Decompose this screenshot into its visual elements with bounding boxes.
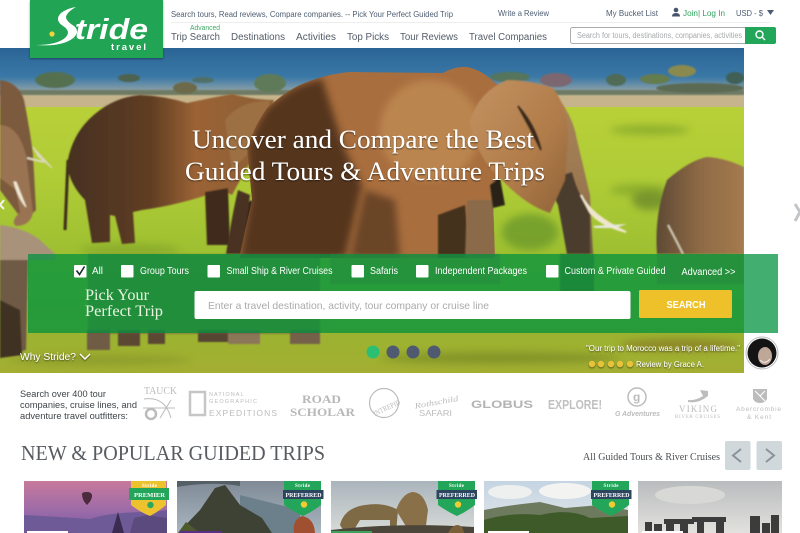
logo: tauck bbox=[143, 386, 178, 419]
logo dot bbox=[49, 31, 55, 37]
main navigation: Tour Reviews bbox=[400, 32, 458, 43]
main navigation: Travel Companies bbox=[469, 32, 547, 43]
carousel button: previous bbox=[725, 441, 750, 470]
header utility links: My Bucket List bbox=[606, 8, 659, 18]
testimonial: "Our trip to Morocco was a trip of a lifetime." bbox=[586, 344, 740, 353]
badge: stride premier: PREMIER bbox=[134, 492, 165, 499]
logo: intrepid bbox=[370, 388, 402, 418]
badge: stride preferred bbox=[591, 481, 632, 516]
search panel: Enter a travel destination, activity, tour company or cruise line bbox=[208, 300, 489, 312]
review rating dots bbox=[589, 361, 633, 367]
main navigation: Activities bbox=[296, 32, 336, 43]
logo swoosh bbox=[36, 7, 77, 45]
badge: stride preferred: PREFERRED bbox=[439, 493, 475, 499]
partners intro text: companies, cruise lines, and bbox=[20, 400, 137, 411]
header logo bbox=[30, 0, 163, 58]
logo: tauck: TAUCK bbox=[144, 386, 178, 397]
badge: stride preferred: Stride bbox=[604, 484, 619, 489]
trip type checkboxes: Safaris bbox=[370, 266, 398, 277]
search button bbox=[745, 27, 776, 44]
header utility links: USD - $ bbox=[736, 8, 763, 18]
header utility links: Write a Review bbox=[498, 8, 550, 18]
testimonial: Review by Grace A. bbox=[636, 360, 704, 369]
search field bbox=[194, 291, 630, 319]
section heading: NEW & POPULAR GUIDED TRIPS bbox=[21, 441, 325, 465]
hero side arrow: previous bbox=[0, 200, 4, 209]
badge: stride preferred: PREFERRED bbox=[286, 493, 322, 499]
main navigation: Destinations bbox=[231, 32, 285, 43]
logo: viking river cruises: VIKING bbox=[679, 404, 718, 414]
logo: abercrombie and kent: & Kent bbox=[747, 414, 771, 421]
logo wordmark: Stride bbox=[74, 14, 148, 46]
logo: abercrombie and kent bbox=[736, 389, 781, 421]
elephant legs under the search band bbox=[87, 254, 744, 350]
logo: g adventures: G Adventures bbox=[615, 411, 660, 418]
search panel bbox=[28, 254, 778, 333]
foreground big elephant bbox=[226, 60, 627, 260]
logo: g adventures: g bbox=[633, 390, 640, 404]
logo: rothschild safari: SAFARI bbox=[419, 408, 452, 418]
trip type checkboxes: Custom & Private Guided bbox=[564, 266, 666, 277]
logo: rothschild safari: Rothschild bbox=[413, 394, 460, 411]
main navigation: Advanced bbox=[190, 23, 220, 32]
partners intro text bbox=[20, 389, 137, 422]
trip type checkboxes: All bbox=[92, 266, 103, 277]
search panel title: Perfect Trip bbox=[85, 303, 163, 320]
search panel title bbox=[85, 287, 163, 320]
logo: explore: EXPLORE! bbox=[548, 397, 602, 412]
logo: national geographic expeditions: NATIONAL bbox=[209, 392, 244, 398]
badge: stride preferred bbox=[283, 481, 324, 516]
reviewer avatar bbox=[745, 336, 779, 370]
testimonial bbox=[586, 344, 740, 369]
logo: road scholar: SCHOLAR bbox=[290, 405, 355, 419]
main navigation: Top Picks bbox=[347, 32, 389, 43]
partner logos bbox=[143, 386, 781, 421]
middle elephant bbox=[65, 94, 274, 245]
trip card: stonehenge bbox=[638, 481, 782, 533]
account links: Join| Log In bbox=[683, 8, 725, 18]
icon: magnifier bbox=[756, 31, 765, 40]
hero side arrow: next bbox=[795, 204, 800, 221]
badge: stride preferred: Stride bbox=[295, 484, 311, 489]
trip type checkboxes: Small Ship & River Cruises bbox=[226, 266, 332, 277]
trip type checkboxes bbox=[74, 265, 736, 278]
trip card: mountain forest bbox=[484, 481, 632, 533]
right elephant bbox=[656, 157, 744, 254]
logo: viking river cruises bbox=[675, 390, 720, 420]
logo: road scholar bbox=[290, 392, 355, 419]
why stride link: Why Stride? bbox=[20, 351, 76, 363]
logo: abercrombie and kent: Abercrombie bbox=[736, 406, 781, 413]
trip type checkboxes: Group Tours bbox=[140, 266, 189, 277]
header search box: Search for tours, destinations, companies, activities bbox=[577, 31, 742, 40]
left elephants bbox=[0, 80, 55, 358]
logo subtitle: travel bbox=[111, 42, 146, 53]
badge: stride preferred: Stride bbox=[449, 484, 465, 489]
logo: national geographic expeditions bbox=[190, 392, 277, 418]
icon: person bbox=[672, 8, 680, 16]
header utility links bbox=[498, 8, 774, 18]
trip card: machu picchu bbox=[177, 481, 324, 533]
trip card: myanmar temples bbox=[24, 481, 169, 533]
carousel dots bbox=[366, 346, 440, 358]
badge: stride preferred: PREFERRED bbox=[594, 493, 630, 499]
logo: national geographic expeditions: GEOGRAPHIC bbox=[209, 399, 257, 405]
badge: stride preferred bbox=[436, 481, 477, 516]
body continuation through the band bbox=[88, 254, 320, 334]
trip card: cheetahs bbox=[331, 481, 477, 533]
logo: globus: GLOBUS bbox=[471, 399, 533, 411]
main navigation: Trip Search bbox=[171, 32, 220, 43]
hot air balloon bbox=[82, 492, 92, 505]
search panel: SEARCH bbox=[666, 300, 706, 311]
hero headline: Guided Tours & Adventure Trips bbox=[185, 157, 545, 186]
logo: national geographic expeditions: EXPEDITIONS bbox=[209, 408, 277, 418]
logo: g adventures bbox=[615, 388, 660, 418]
logo: intrepid: INTREPID bbox=[372, 397, 402, 418]
hero photo: elephants on savanna bbox=[0, 48, 744, 373]
header tagline: Search tours, Read reviews, Compare companies. -- Pick Your Perfect Guided Trip bbox=[171, 9, 453, 19]
all tours link: All Guided Tours & River Cruises bbox=[583, 452, 720, 463]
hero headline bbox=[185, 125, 545, 186]
partners intro text: Search over 400 tour bbox=[20, 389, 107, 400]
partners intro text: adventure travel outfitters: bbox=[20, 411, 128, 422]
main navigation bbox=[171, 23, 547, 43]
logo: road scholar: ROAD bbox=[302, 392, 341, 406]
header search box bbox=[570, 27, 776, 44]
tusks bbox=[581, 195, 626, 232]
hero headline: Uncover and Compare the Best bbox=[192, 125, 535, 154]
trip type checkboxes: Advanced >> bbox=[682, 267, 736, 278]
icon: currency dropdown bbox=[767, 10, 774, 15]
ear bbox=[470, 80, 568, 213]
logo: viking river cruises: RIVER CRUISES bbox=[675, 415, 720, 420]
search button bbox=[639, 290, 732, 318]
search panel title: Pick Your bbox=[85, 287, 150, 304]
badge: stride premier bbox=[129, 481, 169, 516]
carousel button: next bbox=[756, 441, 782, 470]
badge: stride premier: Stride bbox=[142, 484, 158, 489]
head and trunk bbox=[562, 104, 594, 254]
logo: rothschild safari bbox=[413, 394, 460, 418]
trip type checkboxes: Independent Packages bbox=[435, 266, 527, 277]
